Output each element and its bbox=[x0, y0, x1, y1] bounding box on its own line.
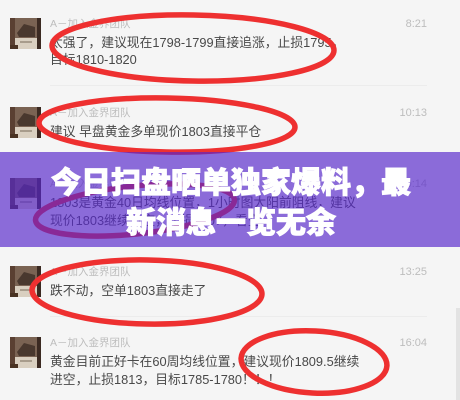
message 3 bbox=[10, 177, 427, 228]
message 5: 黄金目前正好卡在60周均线位置，建议现价1809.5继续 bbox=[50, 354, 360, 369]
scrollbar bbox=[456, 308, 460, 400]
message 1: 太强了，建议现在1798-1799直接追涨，止损1795， bbox=[50, 35, 344, 50]
red circle annotations bbox=[31, 13, 389, 397]
purple title band bbox=[0, 152, 460, 247]
title bbox=[51, 158, 411, 242]
message 1: A－加入金界团队 bbox=[50, 17, 131, 30]
message 5: A－加入金界团队 bbox=[50, 336, 131, 349]
message 2 bbox=[10, 106, 427, 139]
message 4 bbox=[10, 265, 427, 298]
message 5: 16:04 bbox=[399, 337, 427, 349]
message 4: 跌不动，空单1803直接走了 bbox=[50, 283, 206, 298]
message 1 bbox=[10, 17, 427, 67]
title: 新消息一览无余 bbox=[126, 198, 336, 242]
message 1: 目标1810-1820 bbox=[50, 52, 137, 67]
red ellipse 3 bbox=[33, 176, 237, 244]
message 4: 13:25 bbox=[399, 266, 427, 278]
message 3: A－加入金界团队 bbox=[50, 177, 131, 190]
message 2: A－加入金界团队 bbox=[50, 106, 131, 119]
red ellipse 5 bbox=[239, 327, 389, 397]
message 2: 10:13 bbox=[399, 107, 427, 119]
red ellipse 2 bbox=[39, 96, 295, 154]
title: 今日扫盘晒单独家爆料，最 bbox=[51, 158, 411, 202]
message 3: 1803是黄金40日均线位置，1小时图大阳前阻线，建议 bbox=[50, 195, 356, 210]
message 3: 现价1803继续进空，止损1807，看空 bbox=[50, 213, 260, 228]
message 3: 10:14 bbox=[399, 178, 427, 190]
message 4: A－加入金界团队 bbox=[50, 265, 131, 278]
message 1: 8:21 bbox=[406, 18, 427, 30]
message 5: 进空，止损1813，目标1785-1780！！！ bbox=[50, 372, 280, 387]
red ellipse 1 bbox=[51, 13, 335, 83]
red ellipse 4 bbox=[31, 258, 263, 326]
message 2: 建议 早盘黄金多单现价1803直接平仓 bbox=[50, 124, 261, 139]
message 5 bbox=[10, 336, 427, 387]
